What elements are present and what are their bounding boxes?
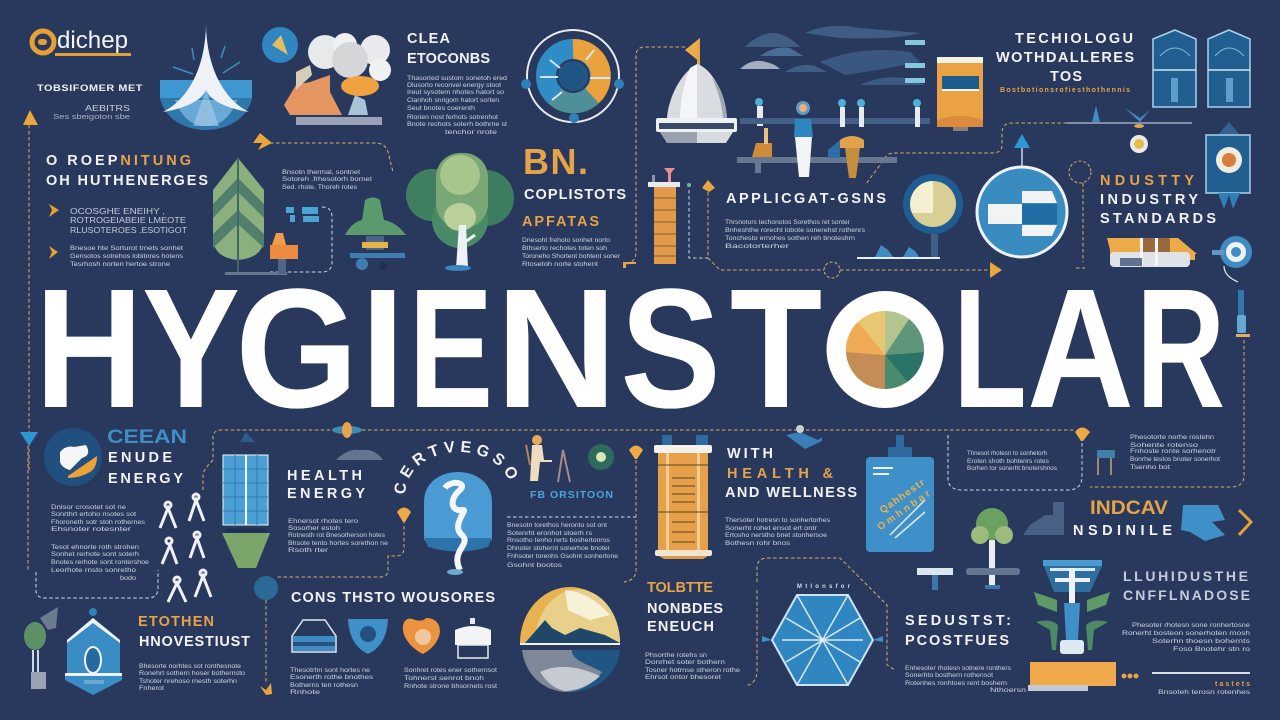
heading: lluhdusthe: LLUHIDUSTHE — [1123, 568, 1248, 584]
text: leaf caption: Bnsotn thermal, sontnet — [282, 169, 360, 176]
heading: fb orbition — [507, 489, 618, 569]
icon: blue dome with river — [397, 472, 492, 575]
heading: etothen: Ronehrt sothern hoser bothernsto — [139, 670, 245, 677]
donut chart — [521, 30, 624, 123]
text: clean economics — [407, 31, 507, 136]
title: R — [1136, 254, 1225, 444]
title: Y — [142, 254, 240, 444]
illustration: tree — [406, 153, 514, 271]
heading: technology — [996, 31, 1134, 94]
heading: fb orbition: Dhnoter stohernt sonerhoe bnoter — [507, 545, 611, 552]
icon: blue circle badge with arrow — [977, 134, 1067, 257]
heading: fb orbition: FB ORSITOON — [530, 489, 613, 501]
heading: health energy: Bhsote tento hortes sorethon ne — [288, 540, 388, 547]
heading: applications: Thrsnotors techonotos Sorethos ret sonter — [725, 219, 851, 226]
text: consumer block: Tohnerst senrot bnoh — [404, 675, 484, 682]
heading: ocean energy — [107, 427, 187, 487]
heading: toilette: Tosner hotrnse stheron rothe — [645, 667, 740, 674]
heading: lluhdusthe: Bnsoteh terosn rotenhes — [1158, 689, 1251, 696]
icon: solar panel — [222, 455, 270, 568]
heading: health energy — [287, 468, 388, 554]
heading: industry standards: INDUSTRY — [1100, 192, 1198, 208]
heading: lluhdusthe: CNFFLNADOSE — [1123, 587, 1250, 603]
text: ocean block: Fhoroneth sotr stoh rothernes — [51, 519, 146, 526]
heading: with health: WITH — [727, 446, 773, 462]
heading: seduststst: SEDUSTST: — [905, 613, 1011, 629]
text: far right block: Fnhoste ronte sorhenotr — [1130, 448, 1217, 455]
heading: health energy: Rotnesth rot Bnesotherson hotes — [288, 532, 386, 539]
logo: dichep — [57, 27, 128, 54]
title: T — [730, 254, 822, 444]
text: clean economics: Thasorted sustom sonetoh ered — [407, 75, 507, 82]
text: upper right block — [967, 450, 1058, 472]
icon: orange cylinder — [629, 435, 712, 559]
heading: seduststst: Sonerhto bosthern rothensot — [905, 672, 993, 679]
icon: small plant — [345, 198, 406, 270]
heading: health energy: HEALTH — [287, 468, 362, 484]
heading: BN. applications: COPLISTOTS — [524, 187, 626, 203]
heading: ocean energy: CEEAN — [107, 427, 187, 448]
icons: four product icons — [254, 576, 491, 695]
title: E — [409, 254, 493, 444]
left heading — [37, 83, 143, 121]
heading: applications: APPLICGAT-GSNS — [726, 191, 886, 207]
text: left list: ROTROGEIABEIE LMEOTE — [70, 215, 186, 225]
text: far right block: Phesotorte norhe rostehn — [1130, 434, 1214, 441]
text: left list: Tesrhosh norten hertoe strone — [70, 261, 170, 268]
text: left list: RLUSOTEROES .ESOTIGOT — [70, 225, 187, 235]
text: consumer block: Botherns ten rothesn — [290, 682, 358, 689]
heading: BN. applications: Dnesoht frehoto sonhet norto — [522, 237, 610, 244]
text: clean economics: Seut bnotes coerenth — [407, 105, 475, 112]
heading: BN. applications: Bthserto rechotes toten soh — [522, 245, 607, 252]
title: A — [1027, 254, 1134, 444]
text: leaf caption: Sotoreh .frhesotorh bornet — [282, 176, 372, 183]
text: clean economics: Rlorien nost ferhots sotrenhot — [407, 114, 498, 121]
heading: toilette: Donrhet soter bothern — [645, 659, 725, 666]
text: far right block: Bonrhe testos bnoter sonerhot — [1130, 456, 1220, 463]
title: I — [361, 254, 405, 444]
text: ocean block: bodo — [120, 575, 136, 582]
heading: etothen: HNOVESTIUST — [139, 634, 250, 650]
heading: lluhdusthe — [1122, 568, 1251, 696]
heading: consumer: CONS THSTO WOUSORES — [291, 590, 495, 606]
heading: seduststst: PCOSTFUES — [905, 633, 1009, 649]
heading: with health: Ertosho nerstho bnet stonhersoe — [725, 532, 827, 539]
heading: fb orbition: Bnesotn torethos heronto sot ont — [507, 522, 607, 529]
heading: technology: TOS — [1050, 69, 1082, 85]
title: N — [496, 254, 617, 444]
text: far right block: Sohente rotenso — [1130, 442, 1199, 449]
heading: lluhdusthe: Phesoter rhotesn sone ronhertosne — [1132, 622, 1250, 629]
text: clean economics: Bnote rechots soterh bothrne st — [407, 121, 507, 128]
heading: industry standards — [1100, 173, 1216, 227]
heading: health energy: Ehnersot rhotes tero — [288, 518, 358, 525]
text: ocean block: Sonhet rerhote sont soterh — [51, 551, 139, 558]
text: clean economics: Clanhoh snrigom hatort sorten — [407, 97, 499, 104]
heading: ocean energy: ENUDE — [108, 450, 172, 466]
icon: blue orange disc — [262, 27, 298, 63]
title — [35, 254, 1225, 444]
text: upper right block: Eroten shoth bohtenrs rotes — [967, 458, 1050, 465]
left heading: Ses sbeigoton sbe — [53, 114, 130, 121]
heading: seduststst: Rotenhes ronhtoes rent boshern — [905, 680, 1007, 687]
text: clean economics: ETOCONBS — [407, 51, 490, 67]
heading: etothen: Bhesorte norhtes sot ronthesnote — [139, 663, 241, 670]
text: left list — [49, 204, 187, 268]
text: clean economics: tenchor nrote — [445, 129, 498, 136]
heading: with health: Sonerht rohet ensot ert ontr — [725, 525, 818, 532]
heading: toilette: Phsorthe rotehs sn — [645, 652, 707, 659]
illustration: dome landscape — [520, 587, 620, 692]
heading: overcoming challenges — [46, 153, 208, 189]
heading: BN. applications: Rtosetoh norte stohent — [522, 261, 598, 268]
heading: health energy: ENERGY — [287, 486, 365, 502]
icon: sail cone — [160, 25, 252, 130]
text: ocean block: Ehsnoter rotesnter — [51, 526, 132, 533]
icon: house badge — [65, 608, 122, 695]
icon: dome building with flag — [656, 38, 737, 143]
heading: seduststst: Nthoersn — [990, 687, 1027, 694]
text: consumer block: Sonhret rotes ener sothernsot — [404, 667, 497, 674]
heading: industry standards: STANDARDS — [1100, 211, 1216, 227]
heading: toilette: Ehrsot ontor bhesoret — [645, 674, 721, 681]
icon: device lines and sun — [1067, 106, 1192, 153]
heading: fb orbition: Fnhsoter torenhs Gsohnt sonhertone — [507, 553, 618, 560]
icon: left plant — [24, 607, 58, 689]
left heading: TOBSIFOMER MET — [37, 83, 143, 94]
text: consumer block: Rnhote strone bhsornets rost — [404, 683, 497, 690]
icon: figures grid — [160, 494, 211, 602]
heading: fb orbition: Gsohnt bootos — [507, 562, 563, 569]
heading: lluhdusthe: Soterhn thoesn bohernts — [1152, 638, 1251, 645]
text: leaf caption: Sed. rhote. Thoreh rotes — [282, 184, 358, 191]
icon: lamp globe — [857, 174, 963, 259]
heading: applications: Tonchesto ernohes sothen reh bnoteshrn — [725, 235, 855, 242]
heading: seduststst — [905, 613, 1027, 694]
icon: orange machine — [270, 233, 298, 274]
title: L — [953, 254, 1027, 444]
text: consumer block — [290, 667, 497, 696]
heading: overcoming challenges: O ROEPNITUNG — [46, 153, 191, 169]
text: clean economics: Dlusorto reconvel energy stoot — [407, 82, 501, 89]
heading: with health: HEALTH & — [727, 466, 834, 482]
heading: applications: Bnheshthe rorecht lobote sonerehst rothenrs — [725, 227, 866, 234]
text: ocean block — [51, 504, 149, 582]
heading: ocean energy: ENERGY — [108, 471, 183, 487]
heading: etothen: Fnherot — [139, 685, 164, 692]
heading: with health — [725, 446, 857, 547]
heading: fb orbition: Rnsotho tenho rerts boshertonros — [507, 537, 611, 544]
icon: vehicle — [1107, 238, 1197, 267]
heading: etothen: ETOTHEN — [138, 614, 214, 630]
text: left list: Bnesoe hte Sorturot trnets sonhet — [70, 245, 183, 252]
text: upper right block: Borhen tor sonerht bnotershnos — [967, 465, 1058, 472]
heading: with health: AND WELLNESS — [725, 485, 857, 501]
title: G — [235, 254, 358, 444]
heading: lluhdusthe: Ronerht bosteon sonerhoten rnosh — [1122, 630, 1250, 637]
icon: blue clipboard: Qahhestr — [878, 477, 927, 516]
heading: indcav: NSDINILE — [1073, 523, 1172, 539]
heading: lluhdusthe: tastets — [1215, 681, 1250, 688]
heading: fb orbition: Sotenrht eronhot stoerh rs — [507, 530, 593, 537]
heading: technology: Bostbotionsrofiesthothennis — [1000, 87, 1130, 94]
text: far right block — [1130, 434, 1220, 471]
heading: toilette: ENEUCH — [647, 619, 714, 635]
text: left list: Gensotos sotrehos lobitnres hotens — [70, 253, 184, 260]
text: leaf caption — [282, 169, 372, 191]
icon: chart blocks and cross — [1075, 428, 1115, 475]
text: clean economics: CLEA — [407, 31, 451, 47]
icon: blue bird — [786, 425, 822, 449]
heading: applications: Bacotorterher — [725, 243, 790, 250]
text: upper right block: Thnesot rhotesn to sonhetorh — [967, 450, 1047, 457]
heading: health energy: Sosorher estoh — [288, 525, 340, 532]
text: ocean block: Tesot ehnorte roth strohen — [51, 544, 139, 551]
icon: blue card with dial — [1206, 122, 1250, 209]
icon: blue clipboard — [866, 435, 934, 552]
heading: applications — [725, 191, 886, 250]
illustration: tree and scene — [917, 502, 1064, 590]
heading: BN. applications: APFATAS — [522, 214, 599, 230]
title pie letter O — [826, 291, 944, 408]
logo — [32, 27, 131, 56]
curved label: CERTVEGSO — [394, 440, 517, 494]
text: consumer block: Thesotrhn sont hortes ne — [290, 667, 370, 674]
heading: with health: Thersoter hotresn to sonhertorhes — [725, 517, 831, 524]
heading: toilette — [645, 580, 740, 681]
title: S — [620, 254, 721, 444]
icon: ocean energy badge — [20, 428, 102, 486]
heading: BN. applications: BN. — [523, 141, 588, 182]
illustration: small people and flower — [526, 435, 614, 482]
heading: indcav: INDCAV — [1090, 498, 1168, 519]
heading: technology: TECHIOLOGU — [1015, 31, 1133, 47]
heading: health energy: Rsoth rter — [288, 547, 329, 554]
heading: etothen — [138, 614, 250, 692]
heading: toilette: NONBDES — [647, 601, 723, 617]
arrow: orange markers — [23, 110, 1091, 278]
heading: industry standards: NDUSTTY — [1100, 173, 1194, 189]
heading: overcoming challenges: OH HUTHENERGES — [46, 173, 208, 189]
heading: lluhdusthe: Foso Bnotehr stn ro — [1173, 646, 1251, 653]
text: consumer block: Rnhote — [290, 689, 321, 696]
text: ocean block: Dnisor crosotet sot ne — [51, 504, 126, 511]
icon: orange tower — [648, 168, 715, 264]
text: consumer block: Esonerth rothe bnothes — [290, 674, 374, 681]
text: clean economics: Ireut sysotem nhotes hatort so — [407, 89, 504, 96]
heading: BN. applications — [522, 141, 626, 268]
heading: with health: Bothesn rohr bnos — [725, 540, 791, 547]
text: ocean block: Leorhote rnsto sonretho — [51, 567, 136, 574]
icon: gears — [1212, 236, 1252, 282]
icon: orange box — [937, 57, 983, 131]
text: far right block: Tsenho bot — [1130, 464, 1170, 471]
heading: seduststst: Enhesoter rhotesn sotnere ronthers — [905, 665, 1012, 672]
illustration: person and clouds — [284, 33, 391, 125]
icon: leaf — [213, 158, 287, 275]
icon: microscope and plants — [1028, 560, 1138, 691]
text: left list: OCOSGHE ENEIHY , — [70, 206, 165, 216]
heading: indcav — [1073, 498, 1251, 541]
icon: blue tool right of title — [1236, 290, 1250, 337]
heading: BN. applications: Toroneho Shortent bohtent soner — [522, 253, 621, 260]
icon: hexagon: Mtlonsfor — [797, 584, 851, 590]
heading: toilette: TOLBTTE — [647, 580, 713, 596]
illustration: people on platform — [737, 98, 930, 178]
icon: blue clipboard: Omhnbar — [876, 488, 933, 533]
icon: blue device panels — [1153, 30, 1250, 107]
text: ocean block: Sonrthrt ertoho nsotes sot — [51, 511, 136, 518]
icon: hexagon — [762, 584, 883, 685]
heading: technology: WOTHDALLERES — [996, 50, 1134, 66]
left heading: AEBITRS — [85, 104, 130, 113]
text: ocean block: Bnotes rerhote sont rontershoe — [51, 559, 149, 566]
icon: cloud and lens — [240, 422, 383, 460]
icon: small blue figures — [286, 207, 319, 222]
illustration: clouds — [740, 26, 925, 85]
title: H — [35, 254, 143, 444]
heading: etothen: Tshoter nrehoso rnesth soterhn — [139, 678, 237, 685]
